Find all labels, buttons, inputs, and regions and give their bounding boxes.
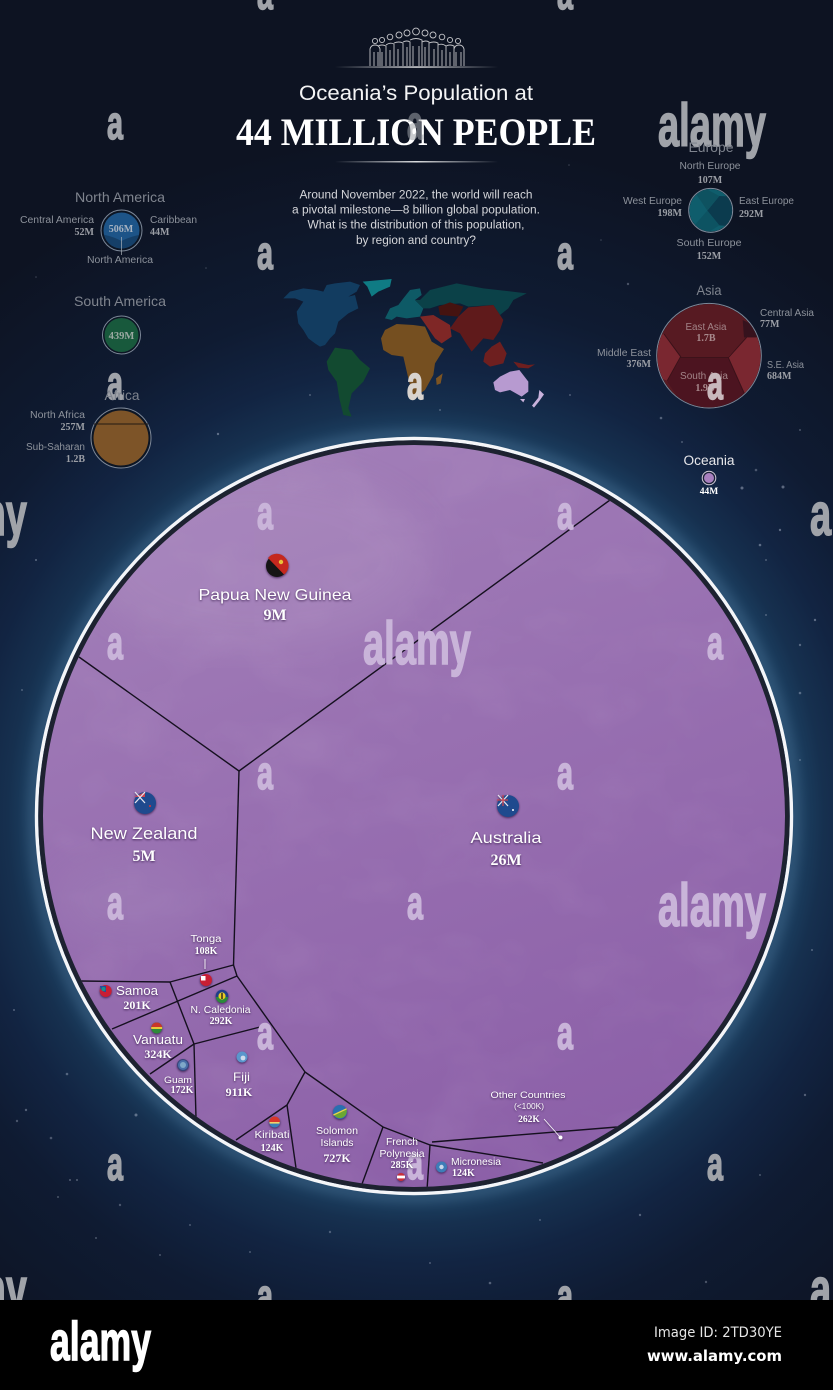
map: New Zealand — [532, 390, 544, 408]
intro paragraph: a pivotal milestone—8 billion global population. — [292, 204, 540, 216]
watermark over circle — [107, 486, 766, 1189]
planet ring — [36, 438, 792, 1194]
watermark over circle: a — [107, 616, 124, 669]
panel: Europe: East Europe — [739, 196, 794, 207]
panel: Oceania: 44M — [700, 487, 718, 497]
panel: Asia: 1.9B — [695, 383, 715, 394]
panel: Africa: 257M — [61, 422, 86, 433]
map: Greenland — [363, 279, 392, 297]
label: Guam: 172K — [171, 1085, 194, 1096]
label: Other Countries: Other Countries — [490, 1090, 566, 1101]
watermark tiles: a — [107, 356, 124, 409]
map: Europe — [385, 288, 423, 320]
panel: North America: 52M — [75, 227, 95, 238]
watermark over circle: a — [257, 746, 274, 799]
watermark over circle: a — [407, 876, 424, 929]
watermark over circle: alamy — [363, 610, 471, 677]
label: Micronesia: Micronesia — [451, 1156, 501, 1168]
label: New Zealand: New Zealand — [90, 824, 198, 843]
label: Kiribati — [254, 1116, 290, 1154]
panel: Europe: North Europe — [680, 161, 741, 172]
title: Oceania’s Population at — [299, 82, 533, 105]
label: Tonga: Tonga — [190, 934, 222, 945]
label: Other Countries: 262K — [518, 1115, 540, 1125]
label: Other Countries: (<100K) — [514, 1102, 544, 1111]
map: Indonesia and Papua — [513, 362, 535, 368]
panel: South America — [74, 293, 166, 354]
label: New Zealand — [90, 792, 198, 865]
label: Vanuatu: Vanuatu — [133, 1032, 183, 1047]
panel: Asia: 684M — [767, 371, 792, 382]
footer bar — [0, 1300, 833, 1390]
panel: North America — [20, 189, 197, 266]
footer logo: alamy — [50, 1310, 151, 1372]
world map: Old World — [381, 283, 544, 408]
label: Papua New Guinea — [198, 554, 352, 624]
intro paragraph: What is the distribution of this population, — [308, 220, 524, 232]
map: Africa — [381, 324, 444, 398]
label: Australia — [470, 795, 542, 869]
watermark over circle: a — [107, 876, 124, 929]
title — [236, 82, 596, 154]
footer image id: Image ID: 2TD30YE — [654, 1325, 782, 1341]
panel: North America: Caribbean — [150, 215, 197, 226]
map: North America — [283, 282, 360, 347]
watermark over circle: a — [557, 746, 574, 799]
map: Australia — [493, 370, 528, 397]
watermark over title: a — [407, 96, 424, 149]
watermark tiles: a — [707, 356, 724, 409]
watermark over circle: a — [557, 486, 574, 539]
header rule top — [335, 66, 498, 68]
map: Middle East — [420, 315, 452, 343]
panel: Asia: Middle East — [597, 348, 651, 359]
planet halo — [33, 435, 795, 1197]
panel: Asia: East Asia — [686, 322, 727, 333]
panel: North America: North America — [87, 255, 153, 266]
intro paragraph: by region and country? — [356, 235, 476, 247]
label: Kiribati: 124K — [261, 1143, 284, 1154]
panel: Oceania — [684, 453, 735, 497]
watermark tiles: a — [557, 226, 574, 279]
map: Russia — [415, 283, 527, 315]
label: Vanuatu — [133, 1022, 183, 1061]
panel: Africa — [26, 387, 151, 468]
label: Solomon Islands — [316, 1105, 358, 1165]
watermark tiles: a — [557, 1269, 574, 1322]
voronoi cell borders — [79, 500, 617, 1190]
header icon: crowd of people — [370, 28, 464, 66]
watermark tiles: a — [257, 226, 274, 279]
label: Papua New Guinea: Papua New Guinea — [198, 587, 352, 604]
label: Fiji: Fiji — [233, 1070, 250, 1084]
watermark over circle: alamy — [658, 872, 766, 939]
label: Guam — [164, 1060, 194, 1096]
watermark over circle: a — [257, 486, 274, 539]
panel: Africa: Africa — [104, 387, 140, 403]
label: Other Countries — [490, 1090, 566, 1140]
label: French Polynesia: French — [386, 1136, 418, 1148]
panel: Europe: 198M — [658, 208, 683, 219]
panel: Voronoi circle of Oceania — [43, 445, 785, 1190]
label: Solomon Islands: Solomon — [316, 1125, 358, 1137]
panel: Europe: South Europe — [676, 238, 742, 249]
panel: North America: North America — [75, 189, 165, 205]
label: Micronesia: 124K — [452, 1168, 475, 1179]
watermark over circle: a — [257, 1006, 274, 1059]
label: Micronesia — [436, 1156, 501, 1179]
label: Australia: Australia — [470, 830, 542, 847]
panel: Asia: 77M — [760, 319, 780, 330]
footer url: www.alamy.com — [647, 1347, 782, 1365]
watermark over circle: a — [707, 616, 724, 669]
label: New Caledonia: N. Caledonia — [190, 1005, 251, 1016]
label: Tonga: 108K — [195, 946, 218, 957]
panel: Africa: Sub-Saharan — [26, 442, 85, 453]
intro paragraph: Around November 2022, the world will reach — [300, 190, 532, 202]
map: South-East Asia — [483, 342, 507, 367]
label: French Polynesia: Polynesia — [380, 1148, 425, 1160]
panel: Asia: 376M — [627, 359, 652, 370]
map: South America — [327, 348, 370, 417]
map: Central Asia — [438, 302, 463, 317]
map: Madagascar — [436, 373, 443, 385]
watermark over circle: a — [557, 1006, 574, 1059]
label: New Zealand: 5M — [132, 848, 156, 865]
panel: Oceania: Oceania — [684, 453, 735, 468]
label: Vanuatu: 324K — [144, 1047, 172, 1061]
watermark tiles: a — [107, 1137, 124, 1190]
map: Tasmania — [520, 399, 525, 402]
label: Solomon Islands: Islands — [320, 1137, 354, 1149]
label: Solomon Islands: 727K — [323, 1151, 351, 1165]
watermark over map: a — [407, 356, 424, 409]
label: Australia: 26M — [490, 852, 522, 869]
label: Fiji — [226, 1052, 253, 1099]
panel: North America: 44M — [150, 227, 170, 238]
panel: Asia: S.E. Asia — [767, 360, 804, 371]
watermark tiles: a — [707, 1137, 724, 1190]
watermark tiles: a — [257, 1269, 274, 1322]
panel: Europe: 152M — [697, 251, 722, 262]
panel: Africa: 1.2B — [66, 454, 85, 465]
label: French Polynesia: 285K — [391, 1160, 414, 1171]
panel: Asia: 1.7B — [696, 333, 716, 344]
label: Samoa: Samoa — [116, 983, 159, 998]
label: New Caledonia — [190, 990, 251, 1027]
panel: Asia: Asia — [696, 282, 722, 298]
title: 44 MILLION PEOPLE — [236, 111, 596, 154]
intro paragraph — [292, 190, 540, 247]
header rule bottom — [335, 161, 498, 162]
panel: Europe: Europe — [688, 139, 734, 155]
panel: North America: Central America — [20, 215, 94, 226]
label: French Polynesia — [380, 1136, 425, 1181]
panel: Asia — [597, 282, 814, 410]
label: Samoa: 201K — [123, 998, 151, 1012]
panel: North America: 506M — [109, 224, 134, 235]
panel: Europe: 292M — [739, 209, 764, 220]
label: Kiribati: Kiribati — [254, 1129, 290, 1141]
label: Papua New Guinea: 9M — [263, 607, 287, 624]
panel: Europe: West Europe — [623, 196, 682, 207]
watermark over Asia: a — [707, 356, 724, 409]
label: Guam: Guam — [164, 1075, 192, 1086]
watermark tiles: alamy — [658, 92, 766, 159]
panel: South America: South America — [74, 293, 166, 309]
watermark over circle: a — [407, 1136, 424, 1189]
panel: Europe — [623, 139, 794, 262]
panel: Asia: South Asia — [680, 371, 728, 382]
panel: Asia: Central Asia — [760, 308, 814, 319]
label: New Caledonia: 292K — [210, 1016, 233, 1027]
label: Tonga — [190, 934, 222, 986]
label: Fiji: 911K — [226, 1085, 253, 1099]
world map: Americas — [283, 279, 392, 417]
label: Samoa — [100, 983, 159, 1012]
map: East and South Asia — [450, 305, 503, 352]
panel: Africa: North Africa — [30, 410, 85, 421]
panel: Europe: 107M — [698, 175, 723, 186]
panel: South America: 439M — [109, 331, 134, 342]
watermark tiles: a — [107, 96, 124, 149]
